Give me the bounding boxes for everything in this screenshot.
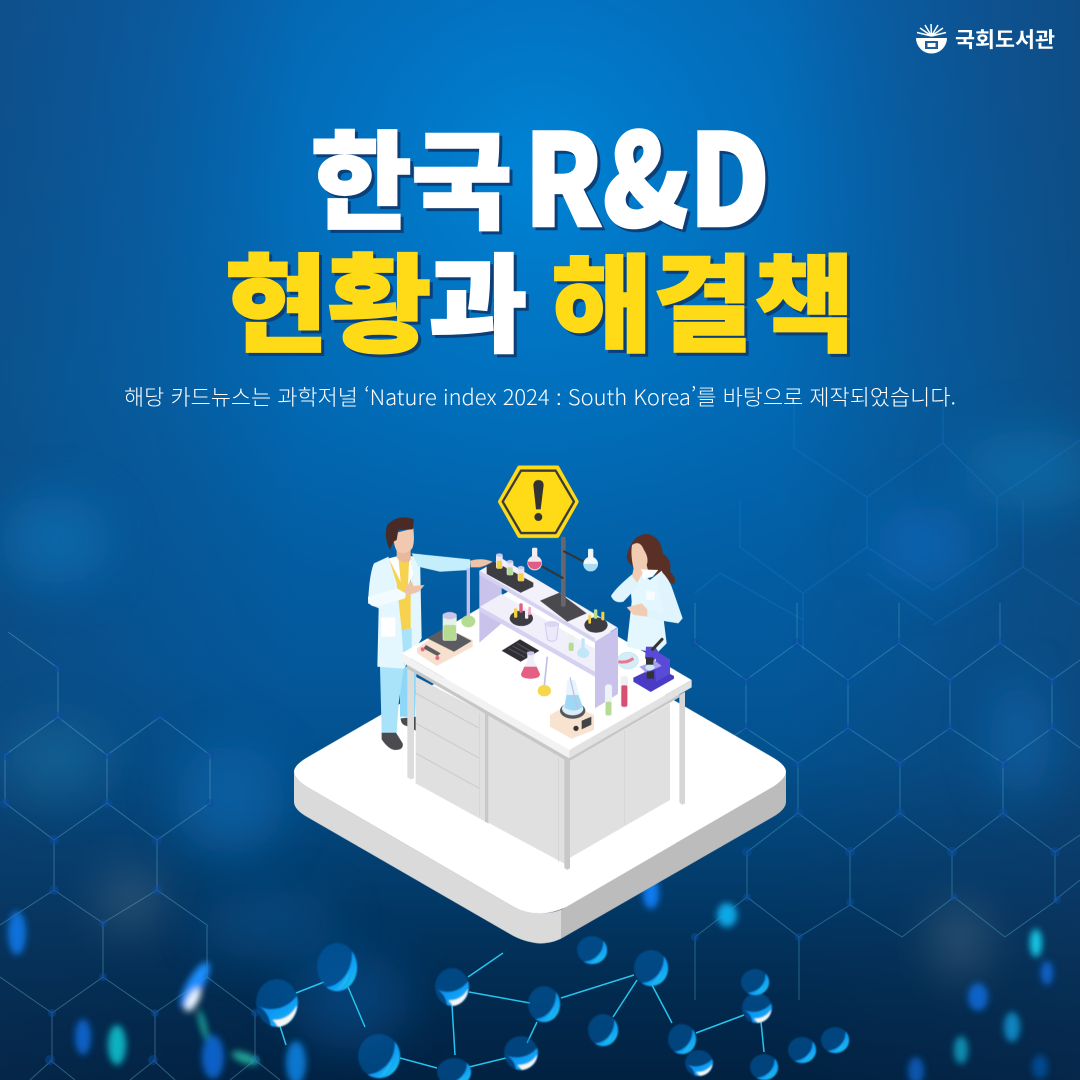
left leg (407, 663, 414, 779)
hexagon network: faint upper right (695, 400, 1080, 650)
face (631, 543, 649, 575)
microscope (633, 639, 674, 692)
hexagon network nodes (0, 638, 1061, 1065)
shelf rack (479, 558, 618, 708)
title line 2 (225, 220, 855, 374)
coat (368, 555, 422, 669)
neck (397, 545, 411, 562)
icon: open book with sunburst (916, 24, 947, 54)
digital scale with beaker (417, 612, 473, 666)
right back leg (679, 692, 685, 805)
drawer lines (416, 693, 479, 788)
desk (402, 582, 692, 870)
front leg (564, 758, 570, 870)
illustration: isometric laboratory (294, 467, 786, 943)
flask: blue (583, 549, 598, 571)
title line 2: 해결책 (551, 220, 855, 374)
pocket (381, 617, 395, 637)
title line 2: 현황 (225, 220, 431, 374)
hair (627, 534, 675, 584)
petri dish (618, 652, 638, 669)
title line 1: 한국 (311, 97, 512, 251)
test tube rack (487, 553, 533, 593)
right arm (646, 572, 683, 623)
warning sign (500, 467, 577, 536)
pink conical flask (521, 651, 540, 679)
pants visible between coat flaps (402, 628, 412, 666)
yellow dish with pipette (538, 657, 551, 696)
shirt (389, 558, 412, 630)
title line 1 (311, 79, 770, 263)
black slide tray (502, 639, 539, 662)
retort stand with flasks (527, 537, 598, 622)
pocket (646, 591, 655, 601)
under-top shadow band (407, 663, 679, 762)
cabinet divider (485, 713, 488, 823)
coat body (627, 571, 668, 653)
logo: National Assembly Library (916, 24, 1055, 54)
glass stirring rod with green dish (461, 568, 475, 627)
hair (386, 517, 414, 550)
title (225, 79, 855, 374)
far leg and shoe (401, 717, 416, 731)
left arm (611, 573, 638, 602)
sleeve (368, 588, 406, 607)
hands (632, 567, 643, 583)
scientist: woman (611, 534, 683, 653)
cabinet right face (568, 703, 670, 859)
subtitle: 해당 카드뉴스는 과학저널 ‘Nature index 2024 : South Korea’를 바탕으로 제작되었습니다. (124, 381, 956, 412)
outstretched arm (412, 553, 470, 572)
collar (389, 556, 413, 585)
hands (470, 559, 493, 567)
title line 1: R&D (524, 79, 770, 263)
hexagon network: left (0, 632, 280, 1080)
scientist: man (368, 517, 493, 750)
hexagon network: right (695, 603, 1080, 1000)
cabinet left face (416, 677, 488, 823)
shelf beakers (545, 621, 589, 658)
blurred bokeh molecules (8, 877, 1053, 1080)
molecule atoms (256, 936, 849, 1080)
hot plate with blue flask (550, 677, 594, 739)
molecule bonds (279, 953, 764, 1068)
logo wordmark: 국회도서관 (955, 24, 1055, 54)
measuring cylinders (605, 676, 628, 716)
platform (294, 632, 786, 943)
face (394, 528, 414, 553)
near leg (380, 667, 404, 733)
shoe (382, 733, 403, 750)
collar (641, 569, 658, 579)
title line 2: 과 (429, 220, 527, 374)
table top (402, 582, 692, 750)
flask: pink (527, 548, 542, 570)
round tube racks (510, 603, 608, 633)
